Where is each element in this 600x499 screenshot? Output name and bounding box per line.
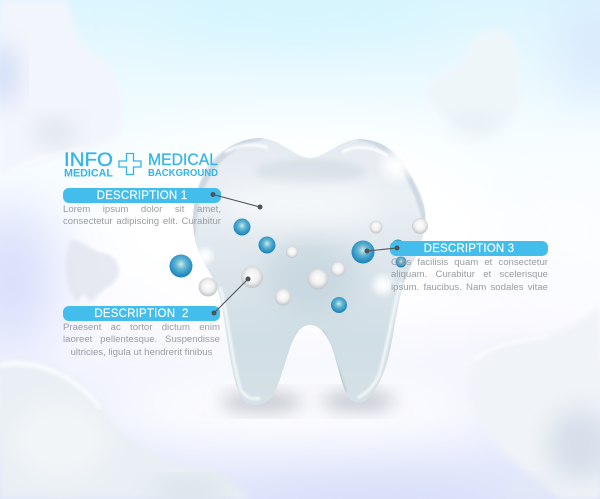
heading block [64, 149, 218, 180]
description 1 bar: DESCRIPTION 1 [97, 190, 187, 202]
description 3 text: aliquam. Curabitur et scelerisque [391, 269, 548, 280]
description 3 text [391, 257, 548, 293]
heading: info medical [64, 149, 218, 180]
leader: description 2 [212, 276, 250, 316]
tooth illustration with spheres [170, 138, 428, 419]
cloud: top right [425, 29, 521, 137]
description 1 bar [63, 188, 221, 203]
leader: description 3 [364, 246, 400, 254]
tooth body [193, 137, 426, 405]
cloud: top left [0, 0, 123, 172]
sparkles [194, 143, 419, 299]
tooth shadow [220, 392, 396, 411]
description 2 text: ultricies, ligula ut hendrerit finibus [71, 347, 212, 358]
heading: info medical: MEDICAL [148, 151, 218, 169]
description 2 bar: DESCRIPTION 2 [94, 308, 189, 320]
spheres: blue [170, 218, 406, 313]
description 3 bar [390, 241, 548, 256]
heading: info medical: BACKGROUND [148, 167, 218, 179]
description 3 text: ipsum. faucibus. Nam sodales vitae [391, 282, 548, 293]
leader: description 1 [210, 192, 262, 210]
description 3 bar: DESCRIPTION 3 [424, 243, 514, 255]
description 2 bar [63, 306, 220, 321]
description 3 text: Cras facilisis quam et consectetur [391, 257, 548, 268]
description 1 text: Lorem ipsum dolor sit amet, [63, 204, 221, 215]
description 1 text [63, 204, 221, 227]
ghost tooth [65, 240, 119, 302]
heading: info medical: INFO [64, 149, 113, 171]
spheres: white [198, 218, 428, 306]
description 2 text: laoreet pellentesque. Suspendisse [63, 334, 220, 345]
cloud: bottom right [468, 305, 600, 499]
heading: info medical: MEDICAL [64, 168, 113, 180]
cloud: bottom left [0, 359, 250, 499]
description 2 text [63, 322, 220, 358]
description 1 text: consectetur adipiscing elit. Curabitur [63, 216, 221, 227]
description 2 text: Praesent ac tortor dictum enim [63, 322, 220, 333]
